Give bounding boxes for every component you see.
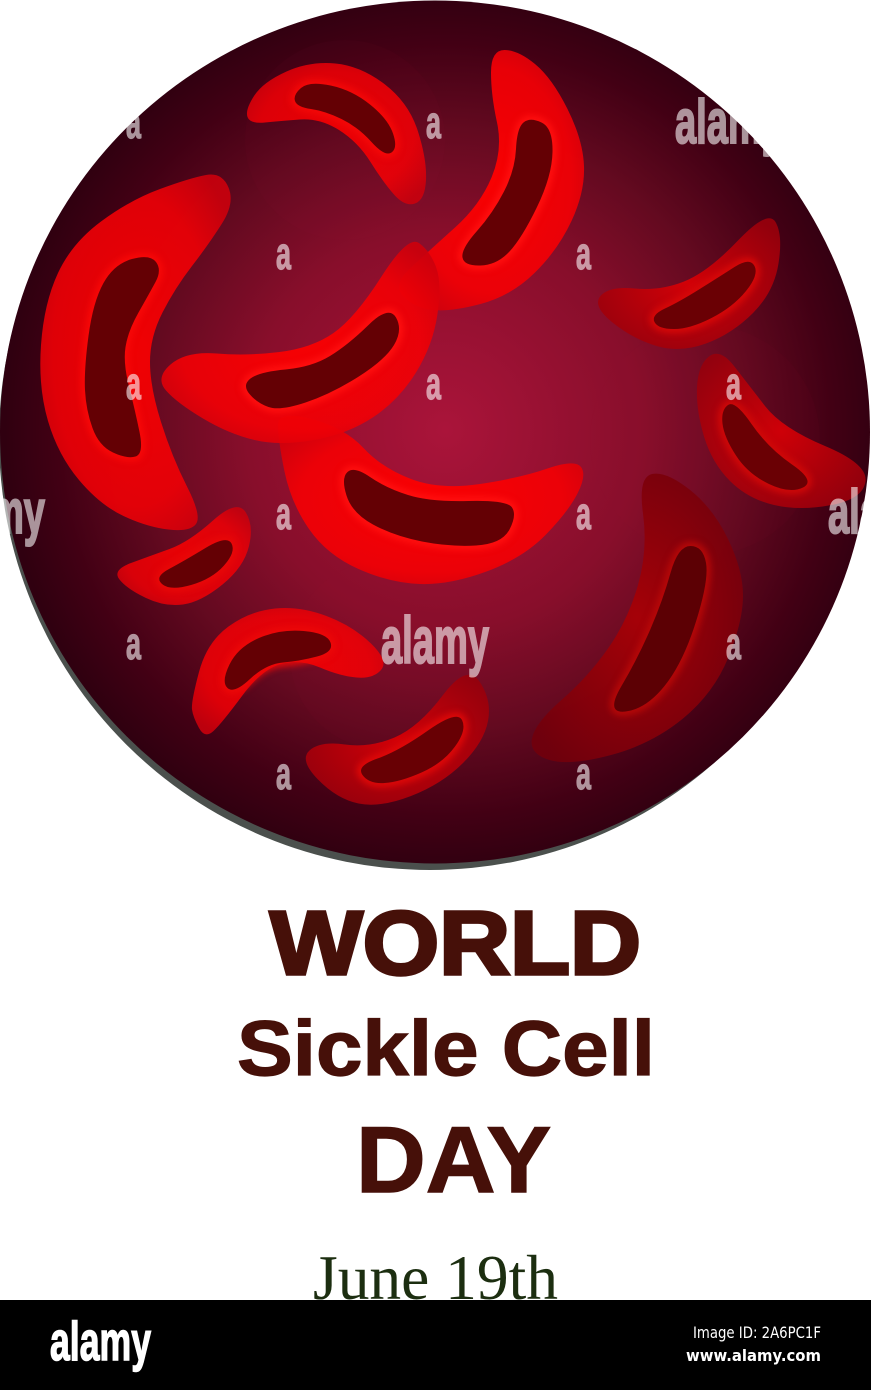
watermarks: a [726, 618, 742, 669]
sickle cell: bottom left [192, 608, 383, 734]
watermarks: a [576, 748, 592, 799]
watermarks: a [726, 358, 742, 409]
watermarks: a [126, 97, 142, 148]
faint background circles [245, 40, 820, 750]
sickle cell: bottom centre [306, 675, 489, 805]
image id: Image ID: 2A6PC1F [693, 1323, 821, 1342]
watermarks [0, 88, 871, 799]
watermarks: a [576, 228, 592, 279]
watermarks: a [276, 488, 292, 539]
sickle cell: small lower left [117, 507, 251, 605]
watermarks: a [276, 748, 292, 799]
watermarks: a [126, 358, 142, 409]
date: June 19th: June 19th [313, 1242, 558, 1313]
footer bar [0, 1300, 871, 1390]
watermarks: a [576, 488, 592, 539]
sickle cell: top right [399, 50, 584, 310]
watermarks: a [276, 228, 292, 279]
watermarks: a [426, 97, 442, 148]
watermarks: alamy [675, 88, 783, 157]
sickle cell: centre lower [278, 416, 583, 584]
sickle cell: lower right [532, 474, 743, 762]
disc shadow rim [0, 6, 861, 870]
panel: microscope disc with sickle cells [0, 0, 871, 870]
sickle cell: large left [40, 175, 231, 530]
watermarks: alamy [381, 603, 489, 677]
disc: blood background [0, 0, 870, 864]
heading: Sickle Cell: Sickle Cell [237, 1004, 655, 1092]
sickle cell: right upper [598, 218, 780, 349]
watermarks: a [426, 358, 442, 409]
sickle cell: top [247, 63, 426, 204]
heading: WORLD: WORLD [270, 894, 641, 994]
sickle cell: right middle [697, 354, 866, 508]
footer logo: alamy: alamy [50, 1310, 151, 1372]
heading: DAY: DAY [356, 1107, 551, 1212]
watermarks: a [126, 618, 142, 669]
sickle cell: centre [161, 242, 439, 443]
website: www.alamy.com [686, 1346, 821, 1365]
